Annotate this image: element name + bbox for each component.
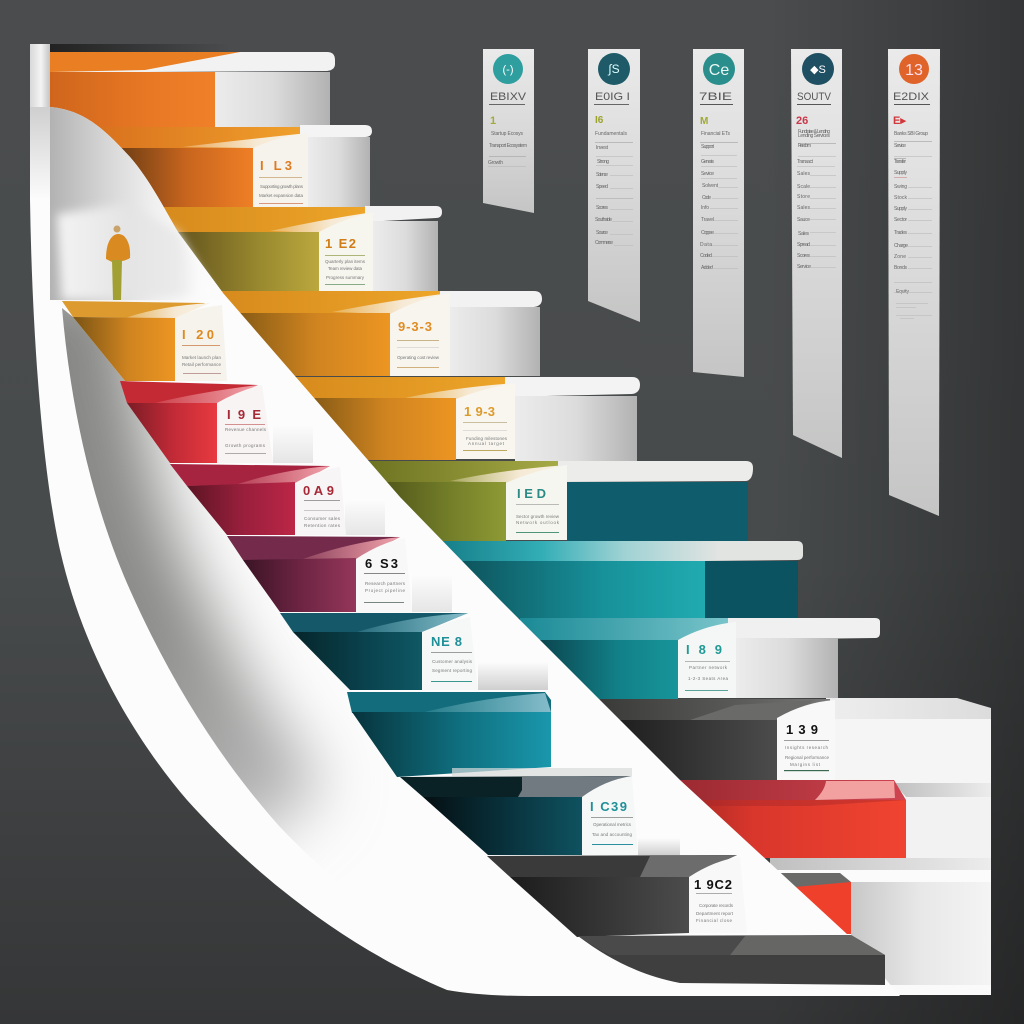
card: teal eighth (678, 622, 736, 698)
text: column 4 rows: Spread (797, 242, 810, 248)
card: olive sixth: Network outlook (516, 520, 560, 525)
card: left orange: I 20 (182, 327, 214, 342)
text: column 1 rows: Startup Ecosys (491, 131, 524, 137)
card: olive third: 1 E2 (325, 236, 356, 251)
step: orange top (50, 44, 335, 128)
number: column 4: 26 (796, 115, 808, 127)
card: olive third: Progress summary (326, 275, 365, 280)
icon: dark teal badge 2 (598, 53, 630, 85)
card: olive third: Team review data (328, 266, 362, 271)
text: column 5 rows: Service (894, 143, 906, 149)
text: column 5 rows: Trades (894, 230, 908, 236)
text: column 3 rows: Code (702, 195, 711, 201)
step: gold fifth (290, 377, 640, 461)
heading: column 3 title: 7BIE (699, 91, 732, 103)
gray shadow wedge under steps (62, 308, 345, 848)
number: column 1: 1 (490, 115, 496, 127)
step: left red (120, 381, 313, 463)
text: column 3 rows: Genesis (701, 159, 714, 165)
text: column 2 rows: Invest (596, 145, 609, 151)
text: column 5 rows: Stock (894, 195, 908, 201)
step: olive sixth (365, 461, 753, 541)
step: left dark eighth (487, 855, 747, 937)
card: dark ninth: Margins list (790, 762, 821, 767)
heading: column 1 title: EBIXV (490, 91, 527, 103)
text: column 4 rows: Fundraise & Lending (798, 129, 830, 135)
card: dark ninth (777, 700, 835, 780)
text: column 2 rows: Science (596, 172, 608, 178)
card: gold fourth: Operating cost review (397, 355, 440, 360)
step: left orange (62, 301, 227, 381)
icon: teal badge 1 (493, 54, 523, 84)
text: column 5 rows: Equity (896, 289, 910, 295)
text: column 5 rows: Charge (894, 243, 908, 249)
panel: white shelving block (770, 698, 991, 995)
icon: navy badge 4: ◆S (810, 64, 826, 76)
card: left crimson (295, 467, 346, 535)
card: left dark teal: Segment reporting (432, 668, 472, 673)
step: teal eighth (520, 618, 880, 699)
card: gold fourth: 9-3-3 (398, 319, 432, 334)
text: column 1 rows (488, 131, 527, 167)
icon: person standing (106, 226, 130, 300)
card: orange second: Supporting growth plans (260, 184, 304, 189)
heading: column 4 title: SOUTV (797, 91, 832, 103)
text: column 4 rows: Sales (797, 205, 810, 211)
card: left maroon: Research partners (365, 581, 406, 586)
text: column 1 rows: Growth (488, 160, 503, 166)
card: teal eighth: 1-2-3 Seats Area (688, 676, 728, 681)
icon: orange badge 5 (899, 54, 929, 84)
text: column 3 rows: Coded (700, 253, 712, 259)
step: dark ninth (600, 699, 835, 780)
card: teal eighth: Partner network (689, 665, 728, 670)
card: left dark teal: NE 8 (431, 634, 462, 649)
text: column 2 rows: Strong (597, 159, 609, 165)
heading: column 5 title: E2DIX (893, 91, 930, 103)
number: column 3: M (700, 116, 708, 127)
card: gold fifth: 1 9-3 (464, 404, 495, 419)
card: left black teal: I C39 (590, 799, 627, 814)
text: column 2 rows: Scores (596, 205, 608, 211)
step: orange second (100, 125, 372, 211)
card: dark ninth: Regional performance (785, 755, 829, 760)
card: left red (217, 385, 273, 463)
icon: teal badge 3 (703, 53, 735, 85)
step: red eleventh (700, 873, 851, 934)
text: column 3 rows: Added (701, 265, 713, 271)
card: gold fifth: Funding milestones (466, 436, 508, 441)
text: column 5 rows: Supply (894, 206, 908, 212)
card: orange second: I L3 (260, 158, 292, 173)
card: left dark eighth: Corporate records (699, 903, 734, 908)
text: column 4 rows: Service (797, 264, 811, 270)
step: left crimson (170, 464, 385, 535)
text: column 2 rows: Southside (595, 217, 612, 223)
step: red tenth (600, 780, 906, 858)
card: left red: Growth programs (225, 443, 266, 448)
card: left crimson: Retention rates (304, 523, 341, 528)
step: teal seventh (440, 541, 803, 618)
step: bottom dark slab (578, 935, 885, 985)
panel: legend column 5 (888, 49, 940, 516)
text: column 2 rows: Source (596, 230, 608, 236)
card: left orange: Market launch plan (182, 355, 221, 360)
card: left dark eighth (689, 857, 747, 933)
card: olive sixth: Sector growth review (516, 514, 560, 519)
card: gold fifth: Annual target (468, 441, 505, 446)
text: column 3 rows (700, 131, 738, 271)
text: column 3 rows: Financial ETs (701, 131, 730, 137)
text: column 5 rows: Banks SBI Group (894, 131, 928, 137)
card: orange second: Market expansion data (259, 193, 303, 198)
card: left crimson: Consumer sales (304, 516, 341, 521)
card: left dark teal: Customer analysis (432, 659, 473, 664)
icon: dark teal badge 2: ∫S (607, 62, 620, 76)
card: dark ninth: 1 3 9 (786, 722, 818, 737)
card: olive sixth: I E D (517, 486, 546, 501)
step: olive third (160, 206, 442, 292)
text: column 3 rows: Solvent (702, 183, 719, 189)
card: left red: Revenue channels (225, 427, 267, 432)
text: column 4 rows: Sales (797, 171, 810, 177)
text: column 5 rows: Swing (894, 184, 907, 190)
text: column 4 rows: Lending Services (798, 133, 830, 139)
icon: orange badge 5: 13 (905, 62, 923, 79)
post: left column shading (30, 44, 50, 200)
card: left orange (175, 305, 227, 381)
card: gold fourth (390, 293, 450, 376)
text: column 5 rows: Supply (894, 170, 908, 176)
text: column 2 rows (595, 131, 633, 246)
card: left crimson: 0 A 9 (303, 483, 334, 498)
step: left teal (347, 692, 551, 777)
step: left black teal (400, 768, 680, 855)
heading: column 2 title: E0IG I (595, 91, 630, 103)
card: left maroon (356, 538, 412, 612)
text: column 5 rows: Zone (894, 254, 906, 260)
card: left black teal: Tax and accounting (592, 832, 632, 837)
number: column 5: E▸ (893, 115, 906, 127)
text: column 3 rows: Coppee (701, 230, 714, 236)
text: column 4 rows: Transact (797, 159, 814, 165)
panel: legend column 4 (791, 49, 842, 458)
card: orange second (253, 133, 308, 211)
text: column 4 rows: Sauce (797, 217, 810, 223)
text: column 4 rows: Store (797, 194, 810, 200)
text: column 5 rows: Transfer (894, 159, 906, 165)
panel: legend column 3 (693, 49, 744, 377)
text: column 1 rows: Transport Ecosystem (489, 143, 527, 149)
text: column 4 rows: Scale (797, 184, 810, 190)
card: left dark eighth: Department report (696, 911, 734, 916)
card: olive third: Quarterly plan items (325, 259, 366, 264)
text: column 5 rows: Bonds (894, 265, 908, 271)
text: column 4 rows: Sales (798, 231, 810, 237)
white swoosh staircase ramp (30, 44, 900, 996)
text: column 3 rows: Info (701, 205, 709, 211)
card: gold fifth (456, 383, 515, 459)
step: left maroon (227, 536, 452, 612)
card: left black teal (582, 776, 638, 855)
icon: teal badge 3: Ce (709, 62, 729, 79)
text: column 5 rows: Sector (894, 217, 907, 223)
text: column 2 rows: Speed (596, 184, 608, 190)
panel: legend column 1 (483, 49, 534, 213)
card: left dark eighth: 1 9C2 (694, 877, 732, 892)
card: teal eighth: I 8 9 (686, 642, 722, 657)
card: left dark eighth: Financial close (696, 918, 732, 923)
card: left maroon: Project pipeline (365, 588, 405, 593)
card: dark ninth: Insights research (785, 745, 828, 750)
text: column 4 rows (797, 129, 836, 270)
text: column 4 rows: Freedom (798, 143, 811, 149)
card: left dark teal (422, 617, 478, 690)
text: column 5 rows (894, 131, 932, 319)
step: left dark teal (280, 613, 548, 690)
card: left orange: Retail performance (182, 362, 221, 367)
card: olive third (319, 212, 373, 292)
text: column 3 rows: Sevice (701, 171, 714, 177)
card: left red: I 9 E (227, 407, 261, 422)
text: column 3 rows: Support (701, 144, 715, 150)
icon: navy badge 4 (802, 53, 834, 85)
card: olive sixth (506, 465, 567, 540)
panel: legend column 2 (588, 49, 640, 322)
number: column 2: I6 (595, 115, 604, 126)
text: column 4 rows: Scores (797, 253, 810, 259)
alcove: upper gray recess (50, 107, 223, 300)
card: left maroon: 6 S3 (365, 556, 398, 571)
icon: teal badge 1: (-) (502, 64, 514, 76)
text: column 2 rows: Commerce (595, 240, 613, 246)
text: column 3 rows: Travel (701, 217, 714, 223)
text: column 3 rows: Data (700, 242, 712, 248)
card: left black teal: Operational metrics (593, 822, 632, 827)
text: column 2 rows: Fundamentals (595, 131, 628, 137)
step: gold fourth (215, 291, 542, 376)
